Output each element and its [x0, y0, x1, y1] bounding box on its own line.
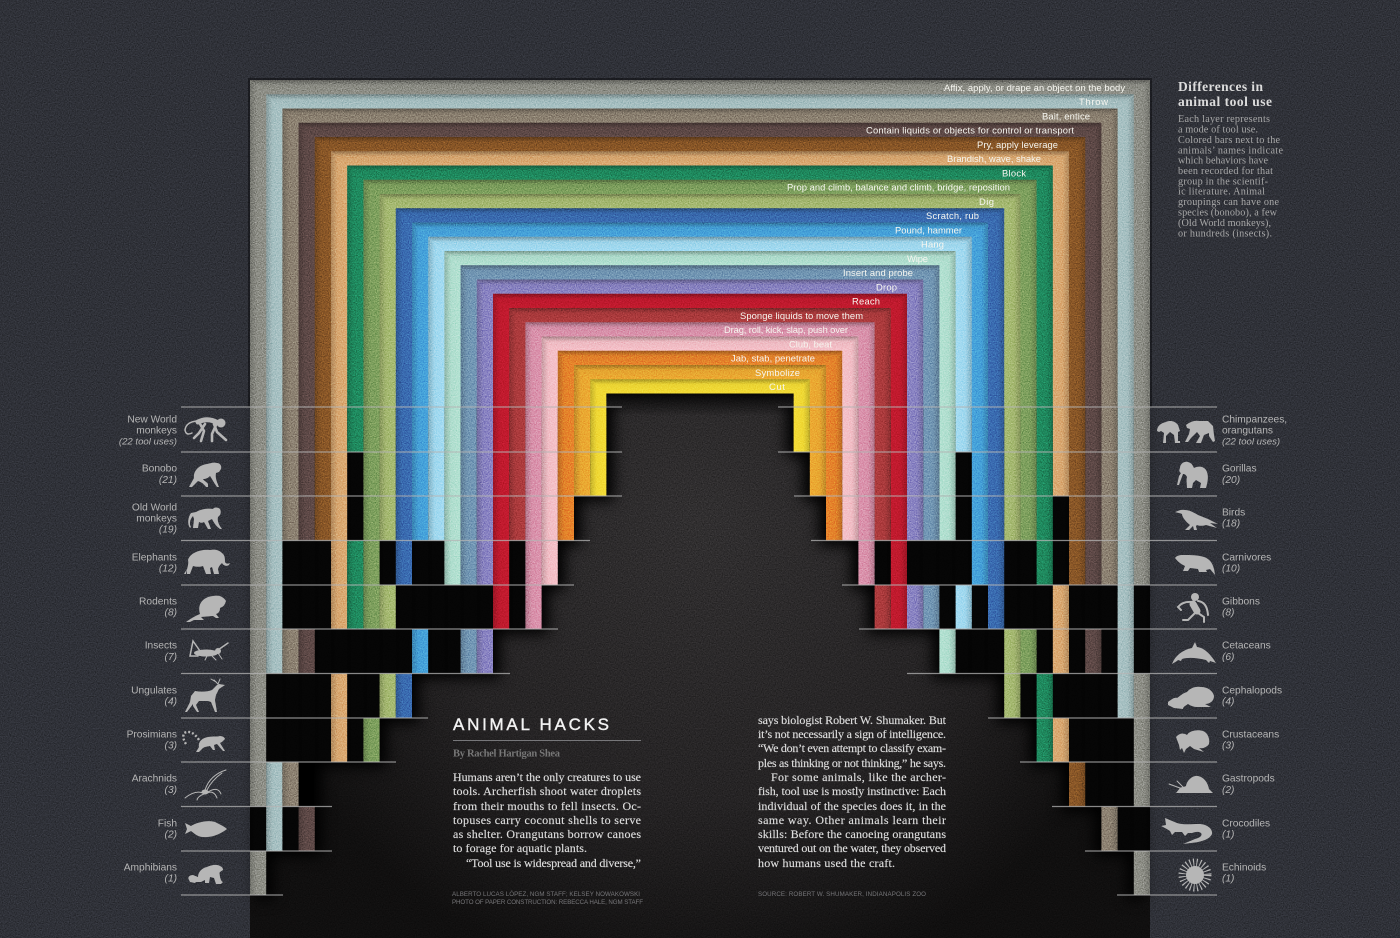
- tool use labels on layers: Brandish, wave, shake: [947, 153, 1041, 164]
- sidebar: differences in animal tool use: ic literature. Animal: [1178, 186, 1265, 198]
- byline: By Rachel Hartigan Shea: [453, 748, 561, 760]
- left animal labels: monkeys: [136, 514, 177, 524]
- right animal labels: Gorillas: [1222, 464, 1257, 474]
- icon: bonobo: [189, 463, 221, 487]
- right animal labels: (20): [1222, 475, 1240, 486]
- left animal labels: Insects: [145, 640, 177, 652]
- stair shadows: [257, 398, 1143, 900]
- left animal labels: Arachnids: [132, 774, 177, 784]
- tool use labels on layers: [724, 82, 1125, 392]
- tool use labels on layers: Insert and probe: [843, 267, 913, 278]
- body text column two: [758, 713, 947, 870]
- tool use labels on layers: Wipe: [907, 253, 928, 264]
- tool use labels on layers: Symbolize: [755, 367, 800, 378]
- right animal labels: (1): [1222, 874, 1234, 884]
- right animal labels: Gastropods: [1222, 774, 1275, 784]
- left animal labels: (3): [165, 740, 177, 752]
- sidebar: differences in animal tool use: group in the scientif-: [1178, 176, 1269, 188]
- right column strips: [794, 407, 1150, 895]
- tool use labels on layers: Jab, stab, penetrate: [731, 353, 815, 364]
- right animal labels: [1222, 414, 1287, 884]
- title: ANIMAL HACKS: [453, 715, 609, 734]
- left animal labels: Old World: [132, 502, 177, 514]
- body text column one: topuses carry coconut shells to serve: [453, 813, 641, 827]
- icon: new world monkey: [185, 418, 226, 441]
- right animal labels: (22 tool uses): [1222, 436, 1280, 448]
- tool use labels on layers: Bait, entice: [1042, 110, 1090, 122]
- icon: frog: [188, 865, 223, 884]
- left animal labels: (22 tool uses): [119, 436, 177, 448]
- icon: carnivore: [1175, 555, 1215, 575]
- tool use labels on layers: Drop: [876, 282, 897, 292]
- sidebar: differences in animal tool use: groupings can have one: [1178, 197, 1279, 208]
- sidebar: differences in animal tool use: Colored bars next to the: [1178, 135, 1280, 146]
- left animal labels: Ungulates: [131, 686, 177, 696]
- left animal labels: New World: [127, 414, 177, 426]
- sidebar: differences in animal tool use: animals’ names indicate: [1178, 146, 1283, 156]
- row divider lines: [181, 407, 1217, 895]
- left animal labels: (12): [159, 564, 177, 574]
- tool use labels on layers: Reach: [852, 296, 880, 307]
- right animal labels: (18): [1222, 518, 1240, 530]
- sidebar: differences in animal tool use: Each layer represents: [1178, 114, 1270, 125]
- tool use labels on layers: Dig: [979, 196, 994, 207]
- black backing of left columns: [250, 407, 606, 895]
- right animal labels: Chimpanzees,: [1222, 414, 1287, 426]
- credits: ALBERTO LUCAS LÓPEZ, NGM STAFF; KELSEY NOWAKOWSKI: [452, 891, 640, 898]
- icon: arachnid: [185, 770, 226, 800]
- left animal labels: Fish: [158, 818, 177, 830]
- left animal labels: (8): [165, 608, 177, 618]
- body text column two: individual of the species does it, in the: [758, 799, 946, 813]
- tool use labels on layers: Sponge liquids to move them: [740, 310, 863, 321]
- icon: echinoid: [1183, 863, 1207, 887]
- body text column one: Humans aren’t the only creatures to use: [453, 770, 641, 784]
- paper shading: [250, 80, 1150, 895]
- icon: octopus: [1168, 687, 1214, 709]
- icon: elephant: [184, 550, 230, 574]
- body text column two: For some animals, like the archer-: [771, 770, 946, 784]
- left animal labels: (21): [159, 475, 177, 486]
- tool use labels on layers: Drag, roll, kick, slap, push over: [724, 324, 848, 335]
- black backing of right columns: [794, 407, 1150, 895]
- left animal labels: (3): [165, 785, 177, 796]
- body text column two: fish, tool use is mostly instinctive: Each: [758, 784, 946, 798]
- icon: chimpanzee and orangutan: [1157, 421, 1215, 443]
- tool use labels on layers: Pound, hammer: [895, 224, 962, 236]
- sidebar: differences in animal tool use: species (bonobo), a few: [1178, 208, 1278, 218]
- tool use labels on layers: Scratch, rub: [926, 210, 979, 221]
- title rule: [453, 740, 641, 742]
- icon: fish: [185, 821, 227, 837]
- tool use labels on layers: Block: [1002, 168, 1026, 178]
- body text column one: from their mouths to fell insects. Oc-: [453, 799, 641, 813]
- tool use labels on layers: Pry, apply leverage: [977, 139, 1058, 150]
- body text column one: [453, 770, 641, 870]
- icon: dolphin: [1172, 642, 1216, 664]
- left column strips: [250, 407, 606, 895]
- icon: prosimian: [183, 732, 225, 752]
- left animal labels: [119, 414, 177, 884]
- icon: gorilla: [1177, 462, 1208, 488]
- right animal labels: Birds: [1222, 508, 1245, 518]
- right animal labels: (1): [1222, 830, 1234, 840]
- right animal labels: Crocodiles: [1222, 818, 1270, 830]
- credits: PHOTO OF PAPER CONSTRUCTION: REBECCA HALE, NGM STAFF: [452, 899, 643, 906]
- body text column two: ventured out on the water, they observed: [758, 841, 946, 855]
- tool use labels on layers: Hang: [921, 239, 944, 250]
- left animal labels: Rodents: [139, 596, 177, 608]
- body text column two: it’s not necessarily a sign of intelligence.: [758, 727, 946, 741]
- frame shadow: [248, 78, 1152, 407]
- body text column two: says biologist Robert W. Shumaker. But: [758, 713, 947, 727]
- icon: grasshopper: [190, 641, 228, 660]
- left animal labels: Bonobo: [142, 464, 177, 474]
- icon: beaver: [186, 596, 226, 622]
- body text column two: how humans used the craft.: [758, 856, 895, 870]
- right animal labels: (4): [1222, 696, 1234, 708]
- tool use labels on layers: Throw: [1079, 96, 1108, 107]
- dark interior backing: [250, 393, 1150, 938]
- sidebar: differences in animal tool use: been recorded for that: [1178, 166, 1273, 177]
- right animal labels: Cephalopods: [1222, 686, 1282, 696]
- body text column two: “We don’t even attempt to classify exam-: [758, 741, 946, 755]
- tool use labels on layers: Cut: [769, 381, 785, 392]
- body text column two: skills: Before the canoeing orangutans: [758, 827, 946, 841]
- right animal labels: (10): [1222, 564, 1240, 574]
- body text column two: ples as thinking or not thinking,” he says.: [758, 756, 946, 770]
- icon: crustacean: [1176, 730, 1209, 753]
- left animal labels: (7): [165, 652, 177, 663]
- right animal labels: Carnivores: [1222, 552, 1271, 564]
- sidebar: differences in animal tool use: [1178, 79, 1283, 240]
- body text column one: “Tool use is widespread and diverse,”: [466, 856, 641, 870]
- left animal labels: Elephants: [132, 552, 177, 564]
- body text column one: to forage for aquatic plants.: [453, 841, 587, 855]
- tool use labels on layers: Affix, apply, or drape an object on the body: [944, 82, 1125, 93]
- right animal labels: (8): [1222, 608, 1234, 618]
- icon: gastropod: [1169, 776, 1213, 793]
- right animal labels: Gibbons: [1222, 596, 1260, 608]
- source: SOURCE: ROBERT W. SHUMAKER, INDIANAPOLIS ZOO: [758, 891, 926, 898]
- right animal labels: Crustaceans: [1222, 730, 1279, 740]
- right animal labels: (2): [1222, 785, 1234, 796]
- left animal labels: Amphibians: [124, 862, 177, 874]
- body text column one: tools. Archerfish shoot water droplets: [453, 784, 641, 798]
- right animal labels: (3): [1222, 740, 1234, 752]
- right animal labels: Cetaceans: [1222, 640, 1271, 652]
- sidebar: differences in animal tool use: which behaviors have: [1178, 156, 1268, 166]
- sidebar: differences in animal tool use: a mode of tool use.: [1178, 124, 1258, 136]
- tool use labels on layers: Club, beat: [789, 338, 832, 350]
- left animal labels: Prosimians: [127, 730, 177, 740]
- nested paper arches: [250, 80, 1150, 408]
- icon: crocodile: [1161, 818, 1212, 844]
- credits: [452, 891, 643, 906]
- tool use labels on layers: Contain liquids or objects for control or transport: [866, 125, 1074, 136]
- centre opening shadow: [606, 394, 794, 416]
- icon: gibbon: [1178, 593, 1208, 622]
- right animal labels: (6): [1222, 652, 1234, 663]
- body text column one: as shelter. Orangutans borrow canoes: [453, 827, 641, 841]
- icon: old world monkey: [188, 508, 222, 529]
- left animal labels: (2): [165, 830, 177, 840]
- sidebar: differences in animal tool use: animal tool use: [1178, 94, 1272, 109]
- sidebar: differences in animal tool use: Differences in: [1178, 79, 1263, 94]
- sidebar: differences in animal tool use: (Old World monkeys),: [1178, 218, 1271, 229]
- left animal labels: monkeys: [136, 426, 177, 436]
- right animal labels: orangutans: [1222, 426, 1273, 436]
- icon: deer: [185, 679, 225, 712]
- body text column two: same way. Other animals learn their: [758, 813, 946, 827]
- icon: bird: [1175, 510, 1218, 530]
- right animal labels: Echinoids: [1222, 862, 1266, 874]
- left animal labels: (1): [165, 874, 177, 884]
- sidebar: differences in animal tool use: or hundreds (insects).: [1178, 228, 1272, 240]
- tool use labels on layers: Prop and climb, balance and climb, bridge, reposition: [787, 182, 1010, 193]
- left animal labels: (19): [159, 524, 177, 536]
- left animal labels: (4): [165, 696, 177, 708]
